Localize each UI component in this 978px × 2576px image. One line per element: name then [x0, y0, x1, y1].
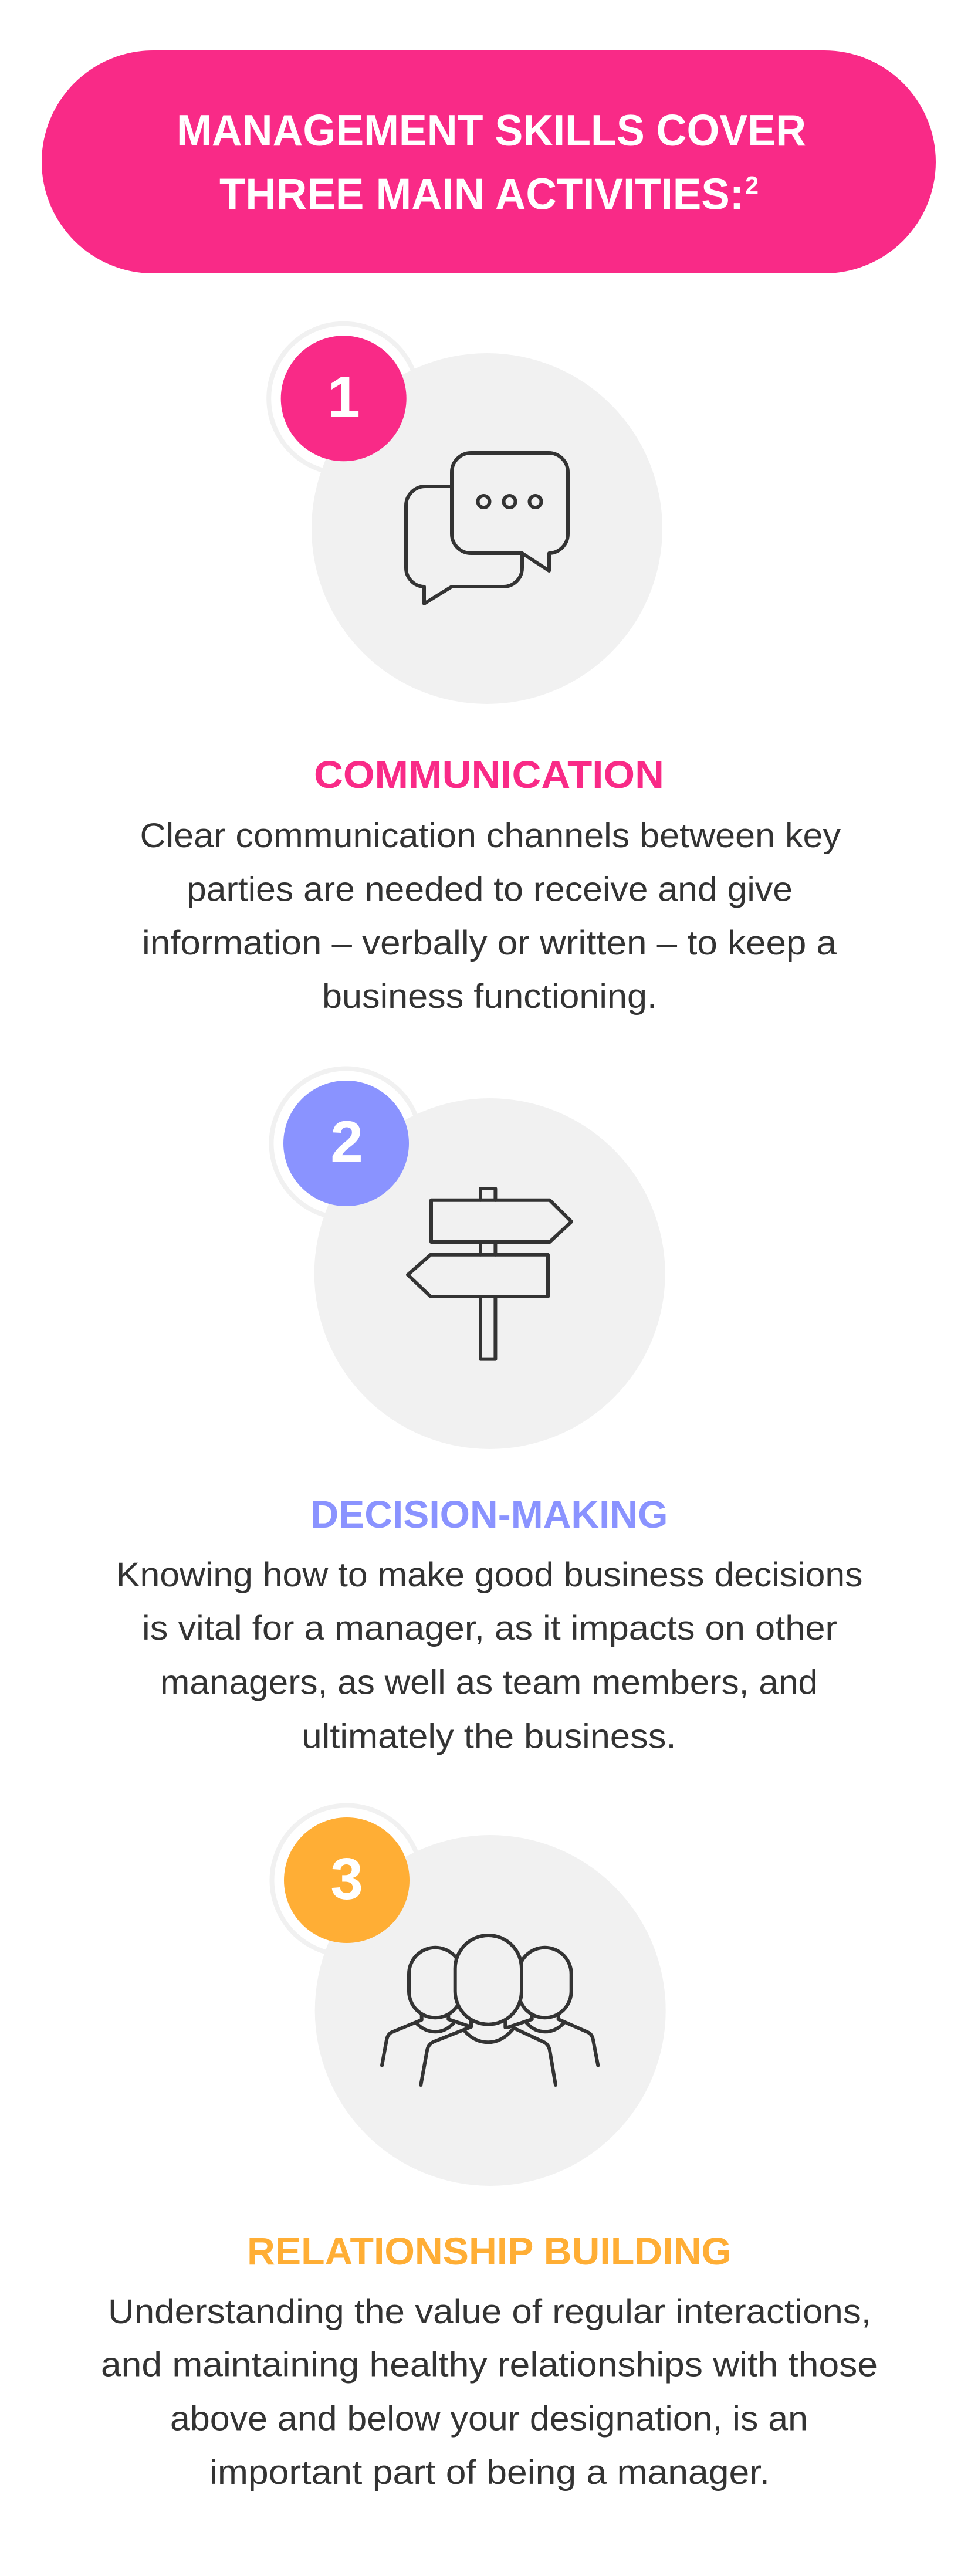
icon backdrop circle	[314, 1098, 665, 1449]
icon: team of people	[382, 1935, 598, 2085]
number badge 2 ring	[271, 1069, 421, 1218]
number badge 1 ring	[269, 324, 418, 473]
text block: relationship building: important part of being a manager.	[209, 2453, 770, 2492]
text block: relationship building: above and below your designation, is an	[170, 2400, 808, 2438]
number badge 2	[283, 1081, 409, 1206]
number badge 3 ring	[272, 1806, 421, 1955]
heading: decision-making: DECISION-MAKING	[311, 1492, 668, 1536]
icon backdrop circle	[312, 353, 662, 704]
number badge 1: 1	[327, 364, 360, 430]
icon: signpost	[408, 1189, 571, 1359]
text block: decision-making: managers, as well as team members, and	[160, 1663, 818, 1701]
title banner: THREE MAIN ACTIVITIES:	[219, 169, 744, 218]
number badge 1	[281, 336, 407, 461]
text block: decision-making: is vital for a manager, as it impacts on other	[142, 1609, 837, 1647]
title banner: 2	[745, 171, 759, 200]
panel: decision-making	[116, 1069, 862, 1755]
icon: speech bubbles	[406, 453, 568, 604]
number badge 3: 3	[330, 1846, 363, 1912]
text block: communication: information – verbally or written – to keep a	[142, 924, 837, 962]
title banner: MANAGEMENT SKILLS COVER	[177, 106, 806, 155]
text block: communication	[140, 817, 841, 1015]
number badge 3	[284, 1817, 410, 1943]
text block: decision-making: Knowing how to make good business decisions	[116, 1556, 862, 1594]
text block: relationship building	[101, 2293, 878, 2492]
text block: decision-making: ultimately the business.	[302, 1717, 676, 1755]
text block: communication: parties are needed to receive and give	[187, 871, 793, 908]
icon backdrop circle	[315, 1835, 666, 2186]
text block: relationship building: Understanding the value of regular interactions,	[108, 2293, 871, 2331]
panel: relationship building	[101, 1806, 878, 2492]
panel: communication	[140, 324, 841, 1015]
heading: communication: COMMUNICATION	[314, 753, 664, 796]
text block: relationship building: and maintaining healthy relationships with those	[101, 2346, 878, 2384]
heading: relationship building: RELATIONSHIP BUILDING	[247, 2229, 732, 2273]
text block: communication: business functioning.	[322, 977, 657, 1015]
title banner	[42, 50, 936, 273]
text block: communication: Clear communication channels between key	[140, 817, 841, 855]
text block: decision-making	[116, 1556, 862, 1755]
number badge 2: 2	[330, 1109, 363, 1175]
